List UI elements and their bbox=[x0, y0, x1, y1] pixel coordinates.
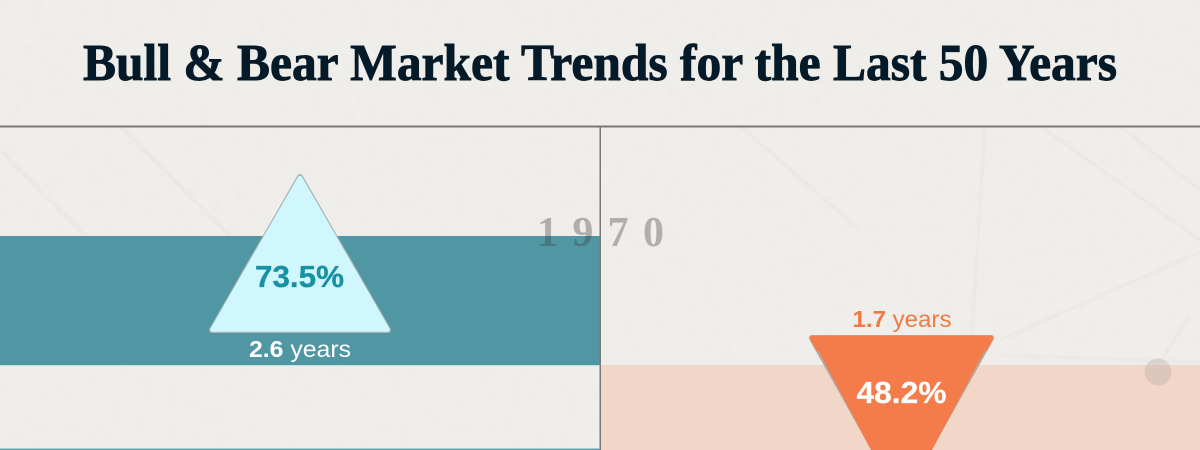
decorative dot bbox=[1144, 358, 1172, 386]
bear duration: 1.7 years bbox=[852, 306, 952, 332]
triangle shape bbox=[812, 338, 991, 450]
bull duration: 2.6 years bbox=[249, 336, 351, 362]
bear market triangle bbox=[812, 306, 991, 450]
bear market bar bbox=[601, 365, 1200, 450]
bear percentage: 48.2% bbox=[856, 375, 946, 410]
bull market triangle bbox=[212, 177, 388, 362]
timeline vertical axis bbox=[600, 126, 601, 450]
timeline horizontal rule bbox=[0, 126, 1200, 128]
triangle shape bbox=[212, 178, 388, 330]
year label: 1970 bbox=[537, 210, 664, 256]
triangle top bbox=[812, 338, 991, 349]
bull market bar bbox=[0, 236, 600, 366]
next bull bar edge bbox=[0, 448, 600, 450]
title: Bull & Bear Market Trends for the Last 50 Years bbox=[83, 35, 1117, 92]
bull percentage: 73.5% bbox=[255, 259, 344, 294]
triangle outline bbox=[212, 177, 388, 330]
triangle outline bbox=[812, 338, 991, 447]
